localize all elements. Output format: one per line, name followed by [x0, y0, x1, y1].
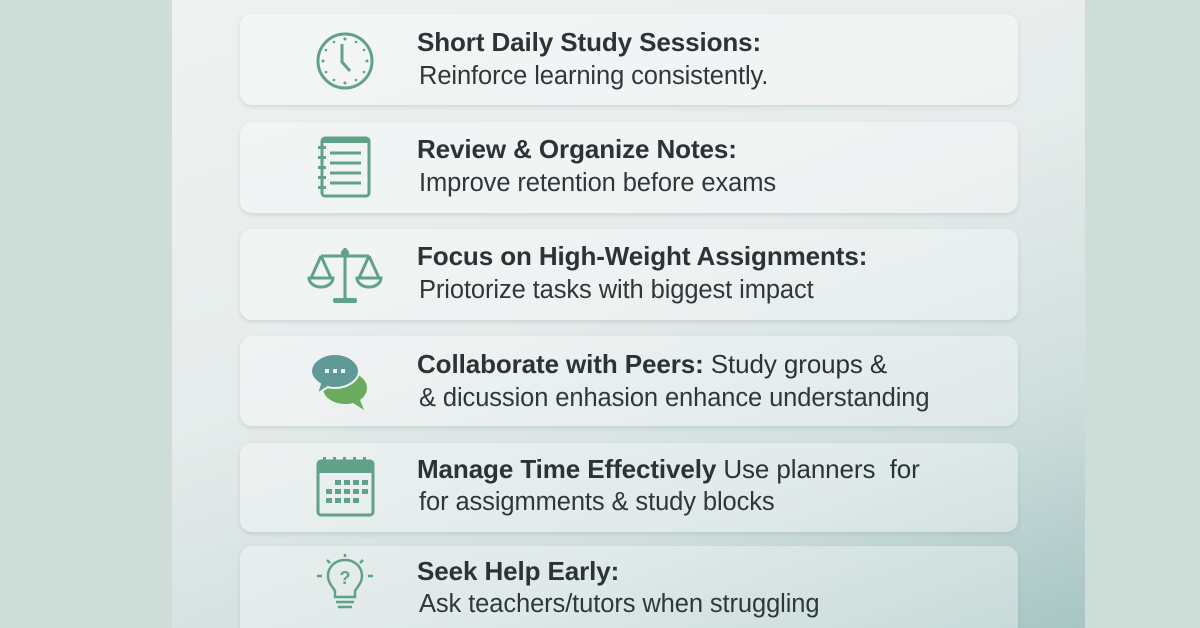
text: focus: Focus on High-Weight Assignments: [417, 241, 867, 271]
text: short daily: Short Daily Study Sessions: [417, 27, 761, 57]
icon: lightbulb: ? [340, 568, 350, 588]
card: focus high-weight [240, 229, 1018, 320]
text: seek help: Seek Help Early: [417, 556, 619, 586]
icon: calendar [316, 457, 374, 516]
text: Priotorize tasks with biggest impact [419, 276, 814, 304]
text: Improve retention before exams [419, 169, 776, 197]
card: review notes [240, 122, 1018, 213]
text: for assigmments & study blocks [419, 488, 775, 516]
card: short daily study sessions [240, 14, 1018, 105]
icon: clock [316, 32, 374, 90]
text: manage time: Manage Time Effectively Use planners for [417, 454, 920, 484]
text: review notes: Review & Organize Notes: [417, 134, 737, 164]
icon: lightbulb [317, 554, 373, 608]
text: & dicussion enhasion enhance understanding [419, 384, 929, 412]
background panel [172, 0, 1085, 628]
card: seek help [240, 546, 1018, 628]
icon: notebook [318, 136, 370, 198]
icon: scales [308, 248, 382, 303]
text: Reinforce learning consistently. [419, 62, 768, 90]
text: Ask teachers/tutors when struggling [419, 590, 819, 618]
icon: chat bubbles [312, 355, 367, 410]
card: collaborate [240, 336, 1018, 426]
card: manage time [240, 443, 1018, 532]
text: collaborate: Collaborate with Peers: Study groups & [417, 349, 887, 379]
